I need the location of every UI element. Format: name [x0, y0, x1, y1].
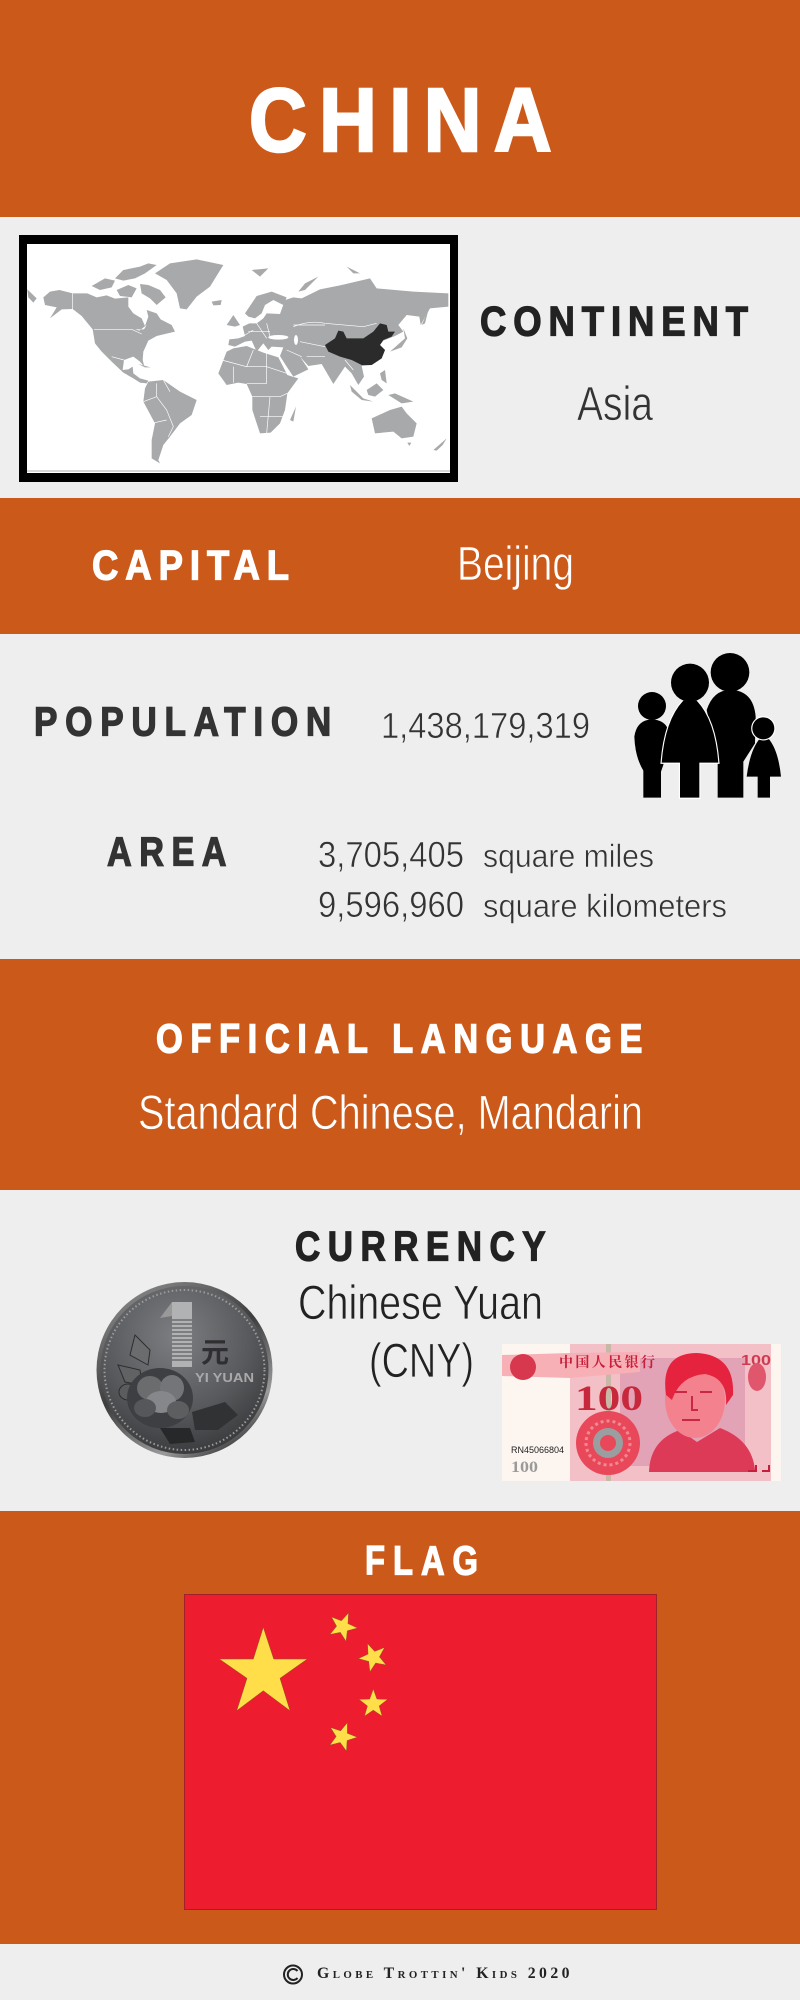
- credit line: Globe Trottin' Kids 2020: [317, 1965, 573, 1982]
- value: cny: (CNY): [369, 1335, 474, 1388]
- water bodies: [135, 325, 298, 345]
- heading: flag: FLAG: [365, 1538, 486, 1584]
- value: area in square kilometers: [318, 884, 727, 925]
- panel: currency: [0, 1190, 800, 1511]
- flag of china: [184, 1594, 656, 1910]
- heading: population: POPULATION: [34, 698, 339, 744]
- heading: capital: CAPITAL: [92, 542, 296, 588]
- value: asia: Asia: [577, 378, 653, 431]
- panel: continent: [0, 217, 800, 498]
- heading: currency: CURRENCY: [295, 1222, 553, 1270]
- value: area in square kilometers: 9,596,960: [318, 884, 464, 925]
- value: language: Standard Chinese, Mandarin: [138, 1087, 643, 1140]
- image: 100 yuan banknote: 100: [741, 1352, 771, 1369]
- title: CHINA: [249, 71, 564, 171]
- value: area in square miles: [318, 834, 654, 875]
- panel: population and area: [0, 634, 800, 959]
- value: beijing: Beijing: [457, 538, 574, 591]
- image: one yuan coin: YI YUAN: [195, 1370, 254, 1385]
- image: 100 yuan banknote: 100: [511, 1459, 538, 1476]
- world map: [19, 235, 458, 482]
- panel: flag: [0, 1511, 800, 1944]
- icon: family: [634, 653, 781, 798]
- heading: official language: OFFICIAL LANGUAGE: [156, 1016, 650, 1062]
- banknote text: 中国人民银行: [559, 1354, 655, 1371]
- panel: footer: [0, 1944, 800, 2000]
- value: area in square kilometers: square kilometers: [483, 888, 727, 924]
- image: 100 yuan banknote: [502, 1344, 781, 1481]
- heading: continent: CONTINENT: [480, 298, 755, 344]
- value: population: 1,438,179,319: [381, 705, 590, 746]
- panel: title header: [0, 0, 800, 217]
- panel: official language: [0, 959, 800, 1190]
- value: area in square miles: 3,705,405: [318, 834, 464, 875]
- china highlight: [325, 323, 395, 365]
- value: chinese yuan: Chinese Yuan: [298, 1277, 543, 1330]
- value: area in square miles: square miles: [483, 838, 654, 874]
- panel: capital: [0, 498, 800, 634]
- image: one yuan coin: 元: [201, 1337, 229, 1368]
- image: 100 yuan banknote: RN45066804: [511, 1445, 564, 1455]
- icon: copyright: [284, 1966, 302, 1984]
- image: 100 yuan banknote: 100: [575, 1378, 643, 1418]
- heading: area: AREA: [107, 828, 234, 874]
- image: one yuan coin: [96, 1282, 272, 1458]
